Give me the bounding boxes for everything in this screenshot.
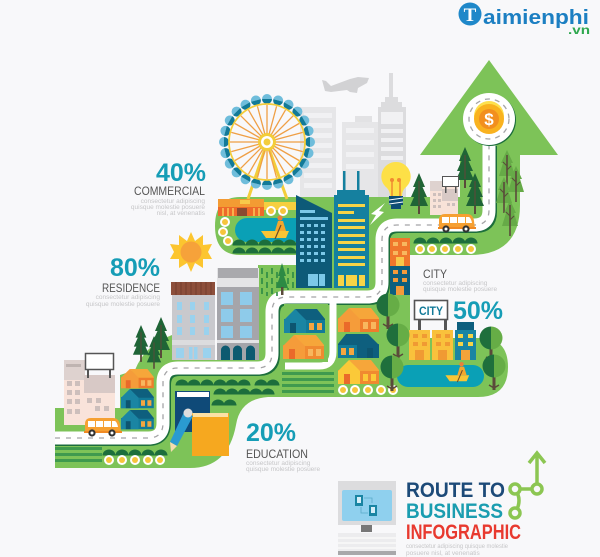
striped field with tree <box>262 263 293 296</box>
stat: 40% commercial: COMMERCIAL <box>134 184 205 198</box>
boat <box>261 215 289 239</box>
pines near bulb <box>410 147 484 214</box>
round trees <box>376 294 506 391</box>
stat: 40% commercial: 40% <box>156 159 206 187</box>
stat: 80% residence: consectetur adipiscing <box>96 294 160 301</box>
brown roof building <box>171 282 215 360</box>
stat: 80% residence: quisque molestie posuere <box>86 301 160 308</box>
ferris wheel <box>219 94 315 199</box>
logo: Taimienphi: .vn <box>568 23 590 37</box>
logo: Taimienphi: aimienphi <box>483 7 589 29</box>
stat: city 50%: consectetur adipiscing <box>423 280 488 287</box>
houses <box>121 369 154 429</box>
icon: computer <box>338 481 396 555</box>
residence buildings <box>171 268 259 360</box>
coin circle on road <box>463 93 516 146</box>
stat: 40% commercial: quisque molestie posuere <box>131 204 205 211</box>
bus top <box>438 214 476 233</box>
boat <box>445 362 469 382</box>
pavilion <box>218 199 296 216</box>
stat: 80% residence <box>86 254 160 308</box>
bus <box>84 418 122 437</box>
stat: city 50% <box>423 267 503 325</box>
flowers centre <box>338 385 398 395</box>
billboard <box>86 354 114 378</box>
yellow buildings <box>409 322 476 360</box>
stat: 40% commercial: consectetur adipiscing <box>141 198 205 205</box>
bushes beside books <box>176 380 280 406</box>
billboard: city: CITY <box>419 304 443 318</box>
panel: lower left block <box>55 354 168 465</box>
pale building <box>64 360 115 425</box>
stat: 20% education: EDUCATION <box>246 447 308 461</box>
green route arrow shape <box>55 60 558 468</box>
title: route to business infographic: ROUTE TO <box>406 479 505 502</box>
panel: orange and navy block beside road <box>390 238 410 295</box>
flowers <box>218 206 288 246</box>
icon: lightning <box>370 203 385 225</box>
pool <box>235 218 296 242</box>
pale building with billboard, top <box>430 176 458 215</box>
stat: 20% education: quisque molestie posuere <box>246 466 320 473</box>
stat: city 50%: 50% <box>453 297 503 325</box>
striped field centre <box>282 372 334 393</box>
logo: Taimienphi: T <box>464 5 477 26</box>
stripes <box>55 447 102 462</box>
icon: light bulb <box>381 162 411 209</box>
panel: yellow stripe tower <box>334 171 369 288</box>
stat: 80% residence: RESIDENCE <box>102 281 160 295</box>
title: route to business infographic: consectetur adipiscing quisque molestie <box>406 543 508 550</box>
olive trees right of road <box>496 150 524 236</box>
title: route to business infographic <box>406 479 521 557</box>
icon: books and pencil <box>170 391 229 456</box>
pill panel: pool and pavilion <box>218 199 296 254</box>
sun <box>170 232 212 272</box>
stat: 20% education: consectetur adipiscing <box>246 460 311 467</box>
icon: green route arrow <box>510 453 545 518</box>
road <box>55 140 489 438</box>
stat: 80% residence: 80% <box>110 254 160 282</box>
stat: city 50%: CITY <box>423 267 447 281</box>
grey skyline and plane <box>300 73 406 197</box>
title: route to business infographic: INFOGRAPHIC <box>406 521 521 544</box>
icon: dollar coin: $ <box>484 110 494 129</box>
pool <box>397 365 484 387</box>
stat: 40% commercial: nisl, at venenatis <box>157 210 206 217</box>
grey building <box>217 268 259 360</box>
panel: city houses <box>283 304 379 384</box>
panel: city block <box>376 294 506 391</box>
stat: city 50%: quisque molestie posuere <box>423 286 497 293</box>
bushes and flowers <box>102 450 168 465</box>
stat: 20% education: 20% <box>246 419 296 447</box>
trees left of buildings <box>133 317 170 369</box>
icon: plane <box>322 77 369 93</box>
title: route to business infographic: posuere nisl, at venenatis <box>406 550 480 557</box>
stat: 40% commercial <box>131 159 206 217</box>
title: route to business infographic: BUSINESS <box>406 500 503 523</box>
bushes <box>232 240 296 254</box>
stat: 20% education <box>246 419 320 473</box>
road shadow <box>55 146 490 440</box>
logo: Taimienphi <box>458 2 590 37</box>
bushes and flowers upper right <box>414 238 478 254</box>
panel: teal tower <box>296 195 332 288</box>
